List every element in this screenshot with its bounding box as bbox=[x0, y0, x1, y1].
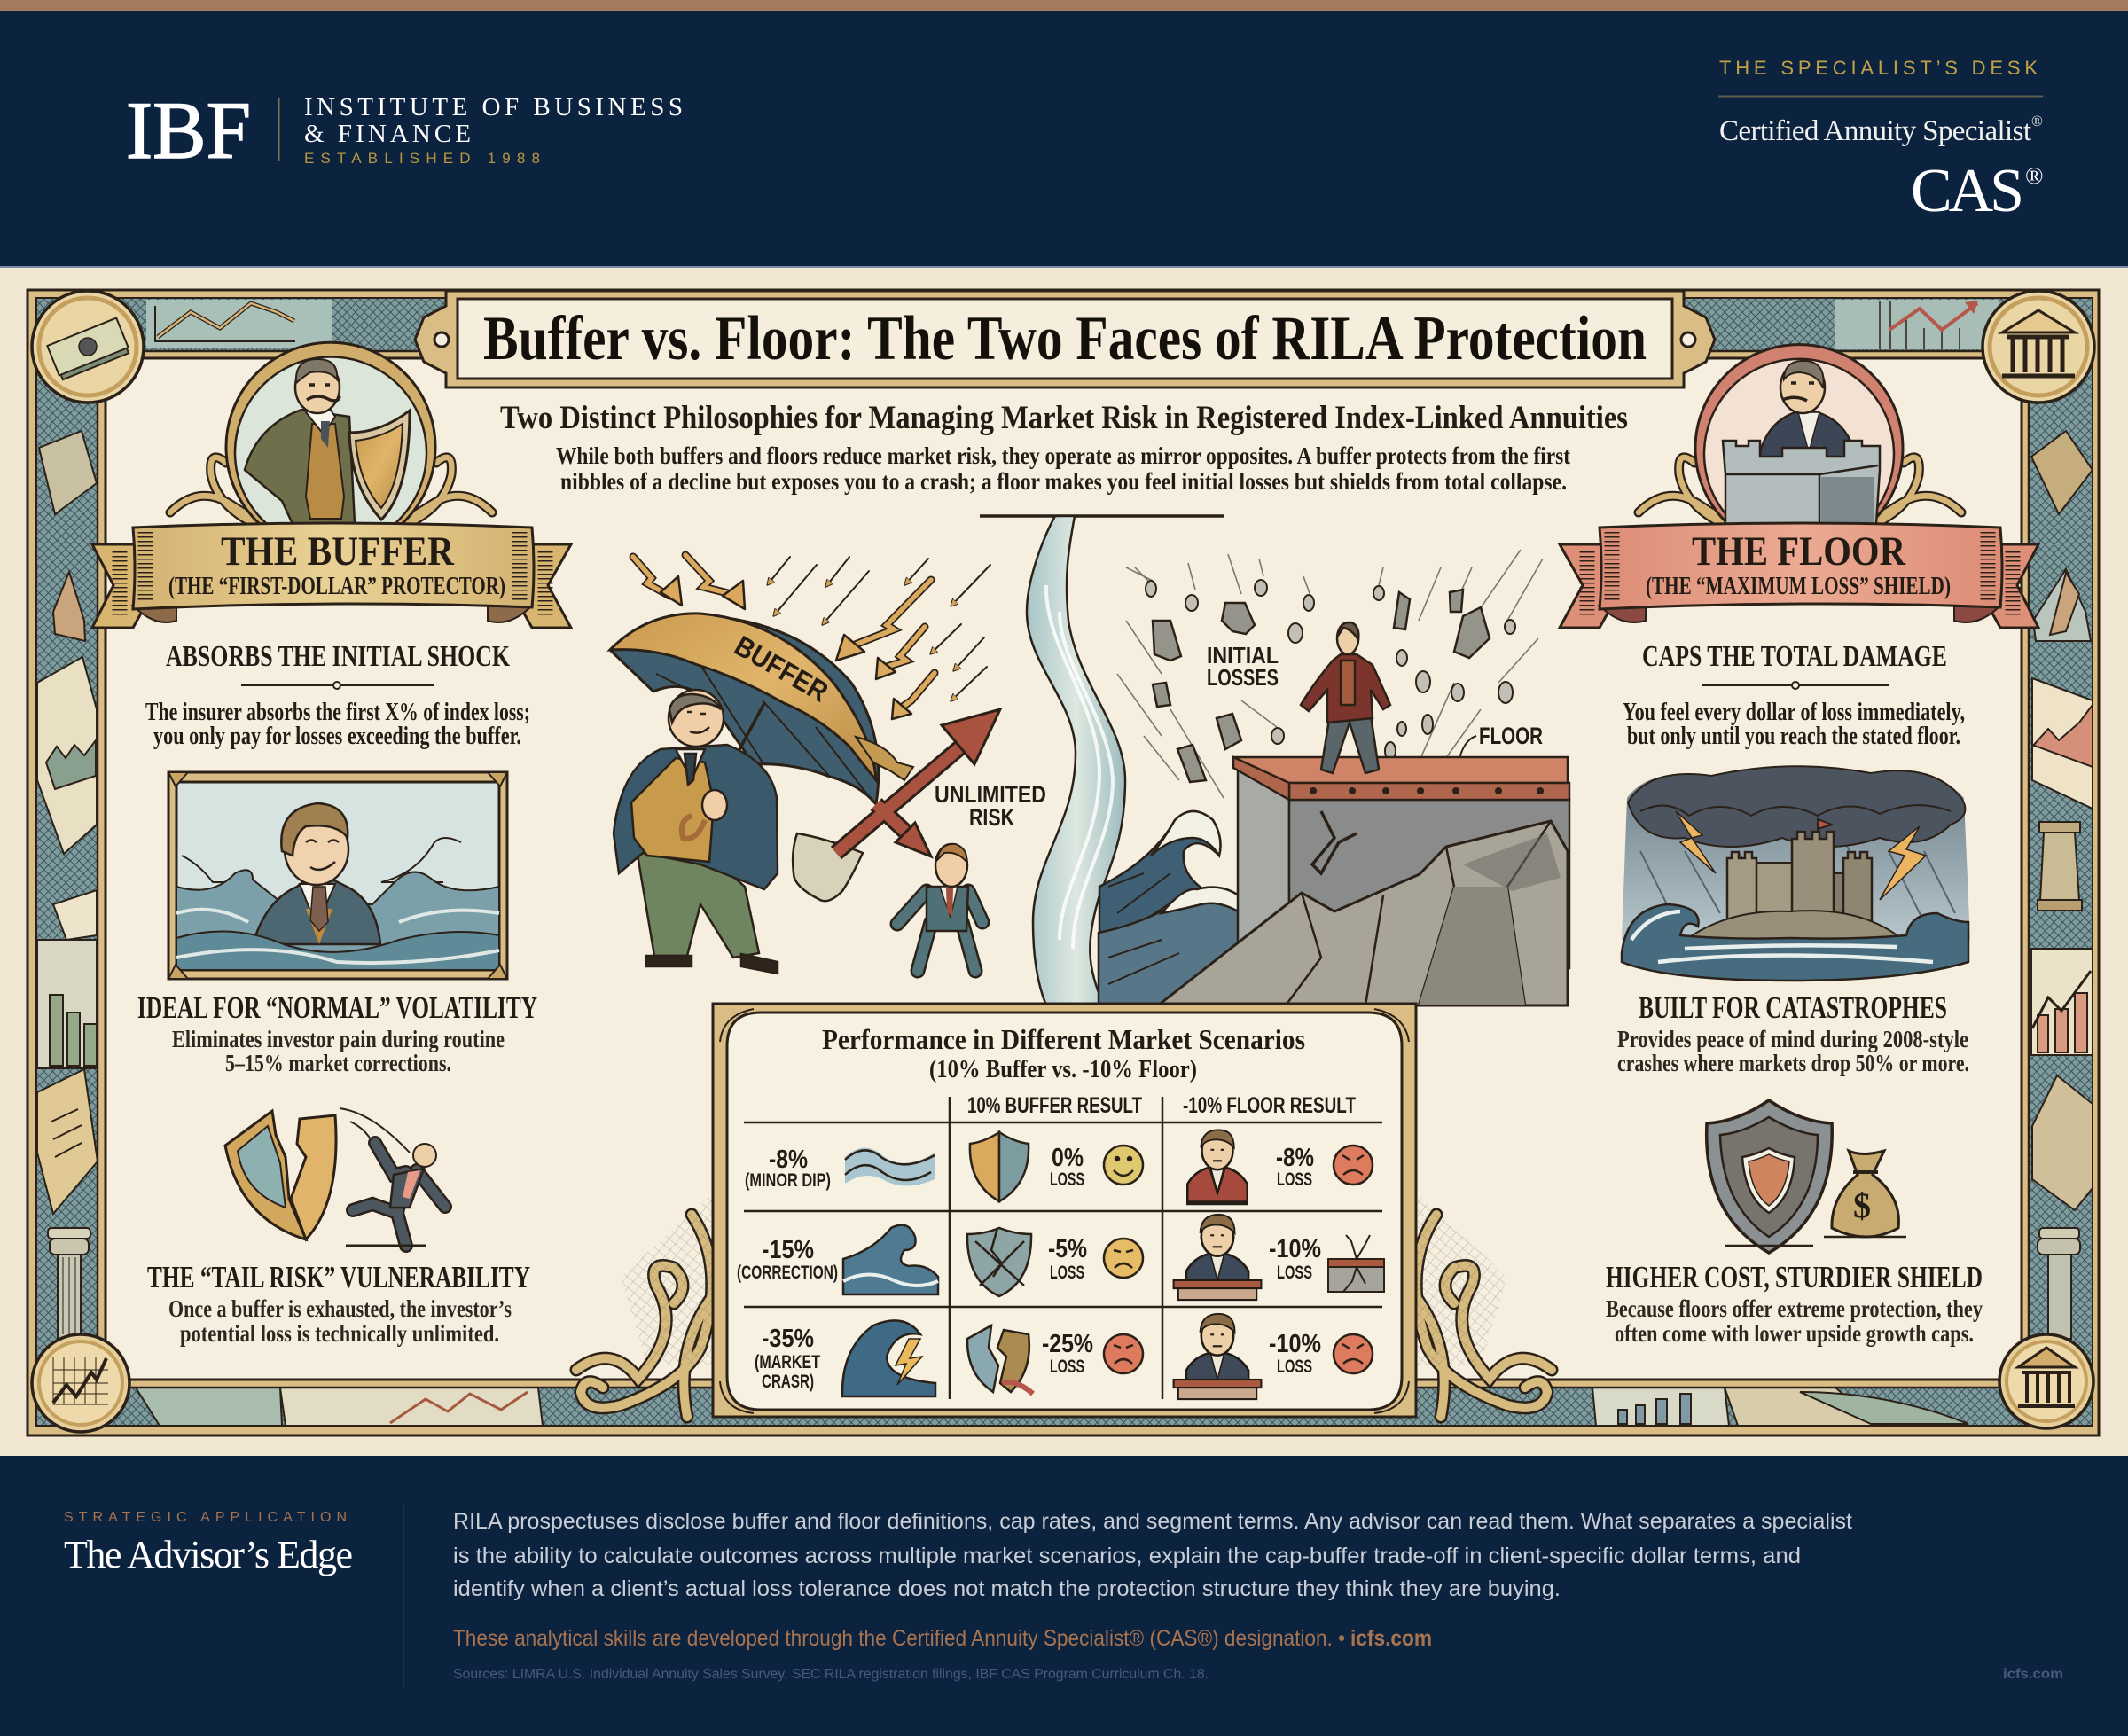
bottom band items bbox=[136, 1388, 1968, 1426]
section: caps the total damage: CAPS THE TOTAL DAMAGE bbox=[1642, 640, 1947, 673]
subheading: maximum loss: (THE “MAXIMUM LOSS” SHIELD) bbox=[1646, 572, 1951, 600]
icon: floor investor red coat bbox=[1187, 1130, 1248, 1204]
row: minor dip: 0% bbox=[1052, 1144, 1084, 1172]
column headers: 10% BUFFER RESULT bbox=[967, 1093, 1142, 1118]
label: initial losses: INITIAL bbox=[1207, 642, 1279, 669]
section: absorbs the initial shock: you only pay for losses exceeding the buffer. bbox=[153, 723, 521, 750]
icon: cracked shield bbox=[967, 1228, 1031, 1296]
column headers bbox=[967, 1093, 1356, 1118]
footer title: The Advisor’s Edge bbox=[64, 1533, 353, 1576]
illustration: buffer umbrella scene bbox=[610, 555, 1046, 974]
icon: upset face bbox=[1104, 1334, 1143, 1373]
section: absorbs the initial shock: ABSORBS THE INITIAL SHOCK bbox=[166, 640, 510, 673]
corner medallion: chart bbox=[32, 1334, 129, 1432]
footer site link: icfs.com bbox=[2003, 1667, 2063, 1682]
CAS mark: ® bbox=[2025, 162, 2044, 189]
row: correction: (CORRECTION) bbox=[737, 1263, 838, 1283]
title: Buffer vs. Floor: The Two Faces of RILA Protection bbox=[483, 304, 1647, 373]
label: initial losses: LOSSES bbox=[1207, 664, 1279, 691]
established line: ESTABLISHED 1988 bbox=[304, 150, 540, 167]
big man bbox=[614, 690, 778, 974]
decorative scrolls bbox=[576, 1193, 1552, 1417]
parchment panel bbox=[0, 268, 2128, 1456]
umbrella canopy bbox=[610, 614, 913, 804]
cliff rocks bbox=[1158, 821, 1568, 1005]
row: minor dip: LOSS bbox=[1050, 1169, 1084, 1190]
logo name: & FINANCE bbox=[304, 120, 471, 148]
heading: the buffer: THE BUFFER bbox=[221, 528, 455, 575]
header rule bbox=[1718, 96, 2043, 98]
footer body: is the ability to calculate outcomes across multiple market scenarios, explain the cap-buffer trade-off in client-specific dollar terms, and bbox=[453, 1544, 1801, 1568]
label: initial losses bbox=[1207, 642, 1279, 691]
waves bbox=[1099, 811, 1243, 1005]
intro text: nibbles of a decline but exposes you to a crash; a floor makes you feel initial losses but shields from total collapse. bbox=[560, 467, 1567, 495]
section: ideal for normal volatility: IDEAL FOR “NORMAL” VOLATILITY bbox=[137, 990, 537, 1025]
ribbon: the floor bbox=[1560, 523, 2038, 628]
footer body: RILA prospectuses disclose buffer and floor definitions, cap rates, and segment terms. Any advisor can read them. What separates a specialist bbox=[453, 1509, 1852, 1534]
logo: IBF: IBF bbox=[126, 85, 251, 176]
label: unlimited risk: RISK bbox=[969, 804, 1014, 831]
icon: cracked shield and falling man bbox=[225, 1108, 445, 1246]
intro text: While both buffers and floors reduce market risk, they operate as mirror opposites. A buffer protects from the first bbox=[556, 442, 1571, 469]
label: floor bbox=[1459, 723, 1543, 762]
bag of market risk bbox=[793, 833, 863, 901]
row: minor dip: -8% bbox=[769, 1146, 808, 1174]
row: minor dip: -8% bbox=[1276, 1144, 1314, 1172]
section: ideal for normal volatility: Eliminates investor pain during routine bbox=[172, 1026, 505, 1052]
icon: intact shield bbox=[970, 1132, 1029, 1201]
ribbon: the buffer bbox=[92, 523, 571, 628]
title banner bbox=[415, 291, 1715, 387]
intro text bbox=[556, 442, 1571, 495]
interior parchment bbox=[98, 351, 2029, 1388]
table title: Performance in Different Market Scenarios bbox=[822, 1023, 1305, 1055]
icon: sad face bbox=[1104, 1239, 1143, 1278]
logo divider bbox=[278, 98, 280, 161]
footer divider bbox=[403, 1505, 404, 1686]
label: unlimited risk: UNLIMITED bbox=[935, 781, 1046, 808]
corner medallion: bank bbox=[1983, 291, 2094, 403]
specialist's desk label: THE SPECIALIST’S DESK bbox=[1719, 57, 2038, 79]
row: correction: LOSS bbox=[1050, 1263, 1084, 1283]
row: correction: LOSS bbox=[1277, 1263, 1312, 1283]
subtitle: Two Distinct Philosophies for Managing Market Risk in Registered Index-Linked Annuities bbox=[500, 400, 1628, 436]
sources: Sources: LIMRA U.S. Individual Annuity Sales Survey, SEC RILA registration filings, IBF CAS Program Curriculum Ch. 18. bbox=[453, 1667, 1209, 1682]
row: market crash: -25% bbox=[1042, 1330, 1093, 1358]
icon: angry face bbox=[1334, 1334, 1373, 1373]
icon: small waves bbox=[845, 1147, 935, 1186]
medallion: floor man in tower bbox=[1639, 345, 1961, 524]
icon: steel shield and money bag: $ bbox=[1853, 1185, 1871, 1225]
top band left chart bbox=[146, 300, 332, 348]
table subtitle: (10% Buffer vs. -10% Floor) bbox=[929, 1056, 1197, 1083]
medallion: buffer man with shield bbox=[170, 342, 492, 524]
icon: angry face bbox=[1334, 1146, 1373, 1185]
corner medallion: bank lower right bbox=[1999, 1334, 2093, 1428]
panel: the buffer bbox=[92, 342, 571, 1347]
panel: market scenario table bbox=[713, 1004, 1416, 1417]
falling rock streaks bbox=[1117, 550, 1543, 798]
section: tail risk vulnerability bbox=[147, 1260, 530, 1347]
row: correction: -10% bbox=[1269, 1235, 1321, 1263]
footer label: STRATEGIC APPLICATION bbox=[64, 1510, 347, 1525]
footer bbox=[0, 1456, 2128, 1736]
falling arrows bbox=[633, 555, 990, 719]
row: correction: -5% bbox=[1048, 1235, 1087, 1263]
corner medallion: money bbox=[32, 291, 144, 403]
section: absorbs the initial shock: The insurer absorbs the first X% of index loss; bbox=[145, 699, 530, 726]
illustration: castle in storm bbox=[1622, 766, 1970, 981]
left band items bbox=[37, 431, 98, 1214]
designation name: ® bbox=[2031, 113, 2043, 129]
icon: steel shield and money bag bbox=[1707, 1100, 1906, 1253]
section: higher cost, sturdier shield: Because floors offer extreme protection, they bbox=[1606, 1295, 1983, 1322]
standing man bbox=[1301, 622, 1390, 773]
panel: the floor bbox=[1560, 345, 2038, 1347]
section: caps the total damage: You feel every dollar of loss immediately, bbox=[1623, 699, 1965, 726]
umbrella label: BUFFER bbox=[729, 629, 833, 708]
icon: investor behind lectern bbox=[1174, 1215, 1261, 1300]
column headers: -10% FLOOR RESULT bbox=[1183, 1093, 1356, 1118]
row: correction bbox=[737, 1215, 1384, 1300]
section: ideal for normal volatility: 5–15% market corrections. bbox=[225, 1050, 451, 1076]
subheading: first-dollar: (THE “FIRST-DOLLAR” PROTECTOR) bbox=[168, 572, 505, 600]
row: market crash: -35% bbox=[762, 1325, 814, 1353]
call to action: icfs.com bbox=[1350, 1626, 1432, 1651]
header bbox=[126, 57, 2044, 225]
rocks bbox=[1153, 590, 1490, 782]
row: market crash: (MARKET bbox=[755, 1352, 820, 1372]
row: market crash: -10% bbox=[1269, 1330, 1321, 1358]
logo name: INSTITUTE OF BUSINESS bbox=[304, 93, 683, 121]
footer body bbox=[453, 1509, 1852, 1601]
section: caps the total damage: but only until you reach the stated floor. bbox=[1627, 723, 1960, 750]
right band items bbox=[2031, 431, 2093, 1339]
left band column bbox=[48, 1228, 90, 1339]
header bottom line bbox=[0, 266, 2128, 268]
illustration: man in the water bbox=[168, 772, 507, 979]
CAS mark: CAS bbox=[1911, 157, 2024, 225]
row: market crash bbox=[755, 1314, 1373, 1399]
icon: shattered shield bbox=[967, 1325, 1033, 1394]
concrete floor platform bbox=[1233, 757, 1569, 968]
section: higher cost, sturdier shield: often come with lower upside growth caps. bbox=[1615, 1320, 1974, 1347]
section: built for catastrophes: BUILT FOR CATASTROPHES bbox=[1639, 990, 1947, 1025]
row: market crash: CRASR) bbox=[762, 1372, 814, 1392]
icon: cracked floor bbox=[1328, 1235, 1384, 1292]
top accent bar bbox=[0, 0, 2128, 11]
row: minor dip: (MINOR DIP) bbox=[745, 1170, 831, 1191]
footer body: identify when a client’s actual loss tolerance does not match the protection structure they think they are buying. bbox=[453, 1576, 1561, 1601]
section: tail risk vulnerability: potential loss is technically unlimited. bbox=[180, 1320, 499, 1347]
ornamental frame bbox=[27, 290, 2099, 1435]
illustration: floor scene bbox=[1099, 550, 1569, 1005]
icon: happy face bbox=[1104, 1146, 1143, 1185]
call to action: These analytical skills are developed through the Certified Annuity Specialist® (CAS®) designation. • bbox=[453, 1626, 1345, 1651]
section: absorbs the initial shock bbox=[145, 640, 530, 750]
section: built for catastrophes: crashes where markets drop 50% or more. bbox=[1617, 1050, 1969, 1076]
icon: breaking wave bbox=[843, 1225, 938, 1294]
icon: investor at lectern bbox=[1174, 1314, 1261, 1399]
row: correction: -15% bbox=[762, 1236, 814, 1264]
section: tail risk vulnerability: THE “TAIL RISK” VULNERABILITY bbox=[147, 1260, 530, 1294]
row: minor dip: LOSS bbox=[1277, 1169, 1312, 1190]
section: caps the total damage bbox=[1623, 640, 1965, 750]
table grid bbox=[744, 1097, 1382, 1399]
icon: storm wave bbox=[842, 1320, 935, 1396]
label: floor: FLOOR bbox=[1479, 723, 1543, 749]
section: built for catastrophes bbox=[1617, 990, 1969, 1076]
row: market crash: LOSS bbox=[1277, 1357, 1312, 1377]
section: higher cost, sturdier shield bbox=[1606, 1260, 1983, 1347]
section: higher cost, sturdier shield: HIGHER COST, STURDIER SHIELD bbox=[1606, 1260, 1983, 1294]
center divider and river bbox=[980, 516, 1224, 1005]
section: tail risk vulnerability: Once a buffer is exhausted, the investor’s bbox=[168, 1295, 512, 1322]
heading: the floor: THE FLOOR bbox=[1692, 528, 1906, 575]
designation name: Certified Annuity Specialist bbox=[1719, 115, 2031, 147]
section: built for catastrophes: Provides peace of mind during 2008-style bbox=[1617, 1026, 1968, 1052]
row: minor dip bbox=[745, 1130, 1373, 1204]
small worried man bbox=[897, 844, 982, 971]
section: ideal for normal volatility bbox=[137, 990, 537, 1076]
logo name bbox=[304, 93, 683, 148]
row: market crash: LOSS bbox=[1050, 1357, 1084, 1377]
arrow: unlimited risk bbox=[836, 709, 1000, 856]
label: unlimited risk bbox=[935, 781, 1046, 831]
top band right chart bbox=[1835, 300, 1999, 349]
